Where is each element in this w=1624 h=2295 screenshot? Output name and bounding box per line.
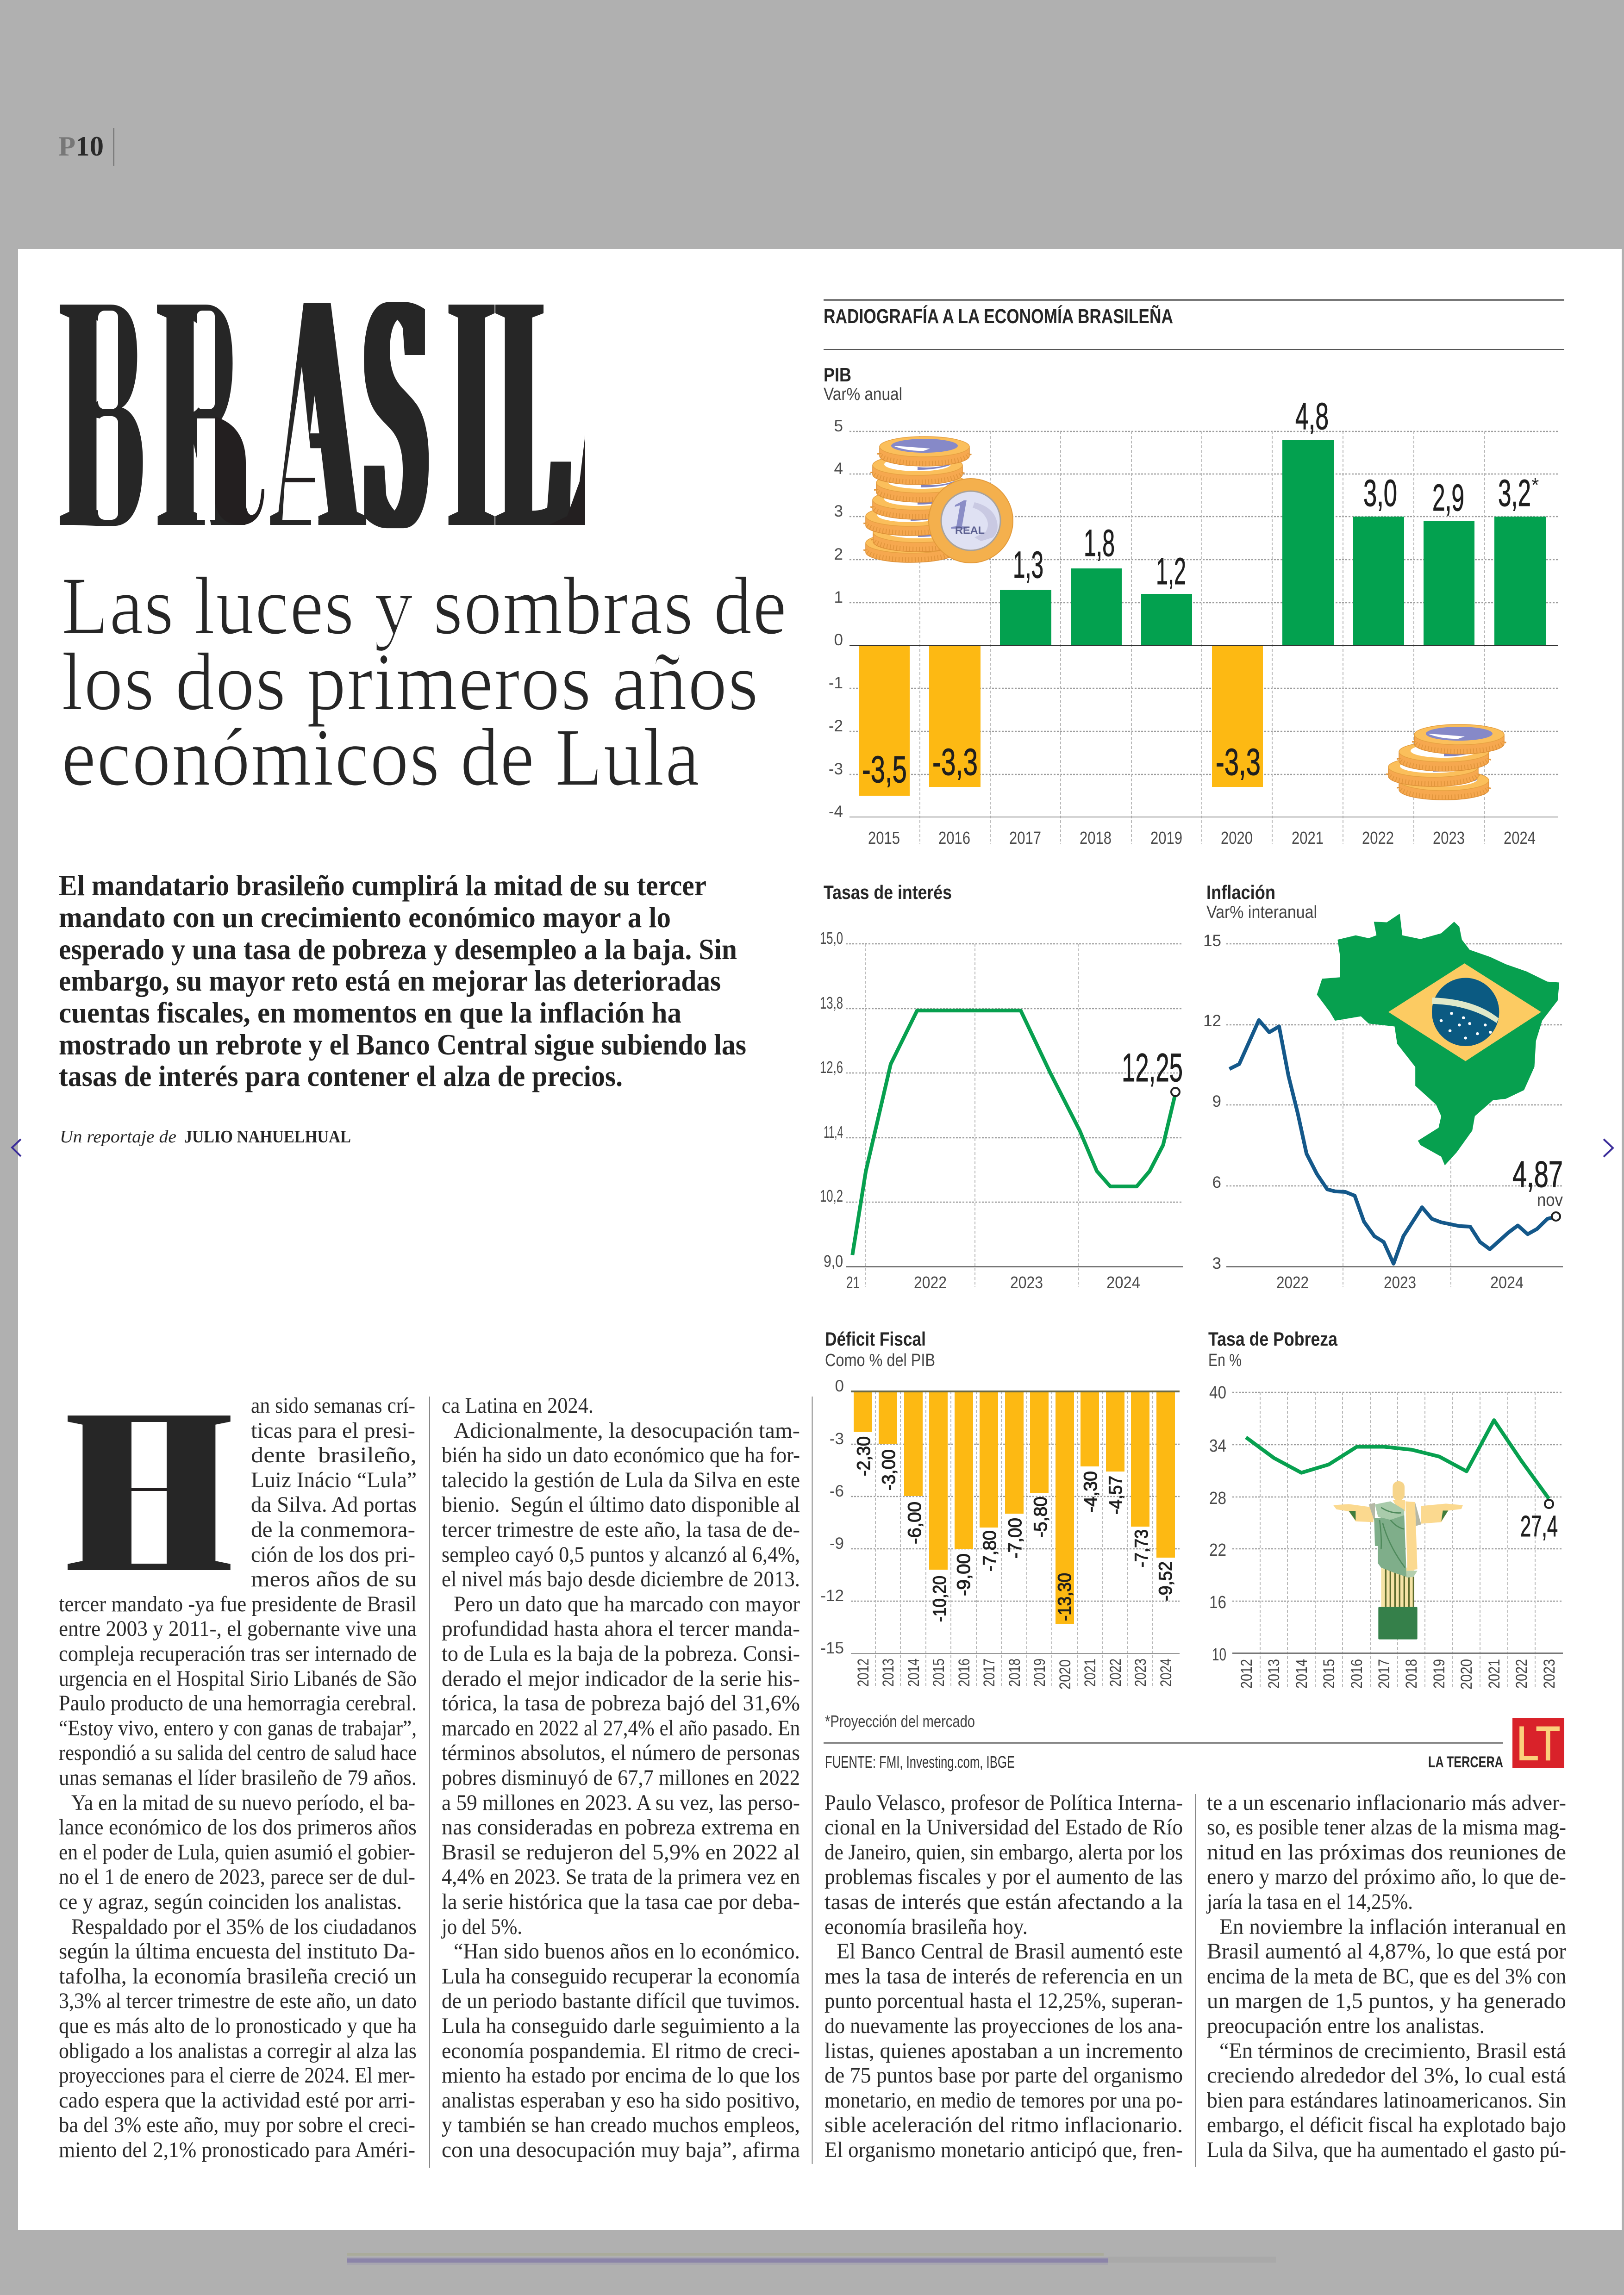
chart: Tasas de interés <box>820 881 1183 1292</box>
article column 2: jo del 5%. <box>441 1915 522 1939</box>
unit: Inflación: Var% interanual <box>1206 903 1317 922</box>
bar value labels: 1,8 <box>1084 522 1115 564</box>
x axis years: 2024 <box>1490 1273 1524 1292</box>
line: poverty rate <box>1246 1420 1549 1499</box>
article column 1: dente brasileño, <box>251 1443 417 1467</box>
x axis years: 2018 <box>1080 829 1112 848</box>
bar value labels: 4,8 <box>1295 395 1329 437</box>
article column 4: te a un escenario inflacionario más adver- <box>1207 1790 1566 1815</box>
x axis years: 2021 <box>1292 829 1324 848</box>
article column 2: bién ha sido un dato económico que ha for- <box>442 1443 800 1467</box>
heading: Inflación: Inflación <box>1206 881 1275 903</box>
x axis years: 2020 <box>1056 1659 1074 1690</box>
byline <box>60 1127 351 1147</box>
byline: JULIO NAHUELHUAL <box>184 1127 351 1147</box>
x axis years: 2015 <box>930 1659 948 1687</box>
intro paragraph: El mandatario brasileño cumplirá la mitad de su tercer <box>59 869 706 902</box>
intro paragraph: mostrado un rebrote y el Banco Central sigue subiendo las <box>59 1028 746 1061</box>
article column 3: El Banco Central de Brasil aumentó este <box>837 1939 1183 1964</box>
y axis labels: 9,0 <box>824 1252 843 1271</box>
x axis years <box>846 1273 1140 1292</box>
y axis labels: -12 <box>820 1587 844 1605</box>
x axis years: 2018 <box>1403 1659 1420 1689</box>
article column 1: “Estoy vivo, entero y con ganas de trabajar”, <box>59 1716 417 1740</box>
article column 2: miento ha estado por encima de lo que los <box>442 2063 800 2088</box>
unit: PIB: Var% anual <box>824 385 902 404</box>
article column 2: nas consideradas en pobreza extrema en <box>442 1815 800 1840</box>
bar value labels: -3,5 <box>862 748 907 791</box>
y axis labels: 10,2 <box>820 1186 843 1205</box>
footnote: *Proyección del mercado <box>825 1712 975 1731</box>
x axis years: 2019 <box>1031 1659 1049 1687</box>
x axis years <box>868 829 1536 848</box>
article column 1: tafolha, la economía brasileña creció un <box>59 1964 417 1989</box>
article column 1: ba del 3% este año, muy por sobre el creci- <box>59 2113 415 2137</box>
article column 2: sempleo cayó 0,5 puntos y alcanzó al 6,4%, <box>442 1542 800 1567</box>
article column 3: Paulo Velasco, profesor de Política Interna- <box>824 1790 1183 1815</box>
y axis labels: -9 <box>830 1534 844 1553</box>
y axis labels: -4 <box>829 803 843 821</box>
source line: FUENTE: FMI, Investing.com, IBGE <box>825 1752 1015 1771</box>
y axis labels: -3 <box>829 760 843 778</box>
bar value labels: 2,9 <box>1432 477 1464 519</box>
bar value labels: -4,57 <box>1106 1476 1126 1515</box>
article column 3: tasas de interés que están afectando a la <box>824 1890 1183 1914</box>
x axis years: 2017 <box>1375 1659 1393 1689</box>
x axis years: 21 <box>846 1273 860 1292</box>
x axis years: 2020 <box>1221 829 1253 848</box>
x axis years: 2022 <box>1513 1659 1530 1689</box>
article column 1: unas semanas el líder brasileño de 79 años. <box>59 1765 417 1790</box>
article column 1: da Silva. Ad portas <box>251 1492 417 1517</box>
y axis labels: 40 <box>1209 1383 1226 1403</box>
x axis years: 2022 <box>914 1273 947 1292</box>
bar value labels: -7,80 <box>980 1530 1000 1572</box>
article column 1: Luiz Inácio “Lula” <box>251 1468 417 1492</box>
y axis labels: 6 <box>1212 1173 1221 1191</box>
article column 2 <box>441 1393 800 2162</box>
article column 3: de 75 puntos base por parte del organismo <box>824 2063 1183 2088</box>
y axis labels: 4 <box>834 460 843 478</box>
article column 4: enero y marzo del próximo año, lo que de- <box>1207 1865 1566 1889</box>
bar value labels: -6,00 <box>905 1502 925 1544</box>
article column 1: respondió a su salida del centro de salud hace <box>59 1740 417 1765</box>
article column 4: embargo, el déficit fiscal ha explotado bajo <box>1207 2113 1566 2137</box>
article column 2: talecido la gestión de Lula da Silva en este <box>442 1468 800 1492</box>
article column 1: ción de los dos pri- <box>251 1542 415 1567</box>
x axis years <box>855 1659 1175 1690</box>
heading: Tasa de Pobreza: Tasa de Pobreza <box>1208 1328 1338 1350</box>
y axis labels: 15 <box>1203 932 1221 950</box>
column rules <box>430 1397 1195 2168</box>
chart: Tasa de Pobreza <box>1208 1328 1563 1690</box>
bar value labels: 1,3 <box>1013 544 1043 586</box>
article column 1: no el 1 de enero de 2023, parece ser de dul- <box>59 1865 415 1889</box>
y axis labels: 9 <box>1212 1092 1221 1110</box>
line: inflation <box>1230 1020 1556 1264</box>
article column 2: el nivel más bajo desde diciembre de 2013. <box>442 1567 800 1591</box>
y axis labels: 11,4 <box>824 1123 843 1141</box>
article column 1: Paulo producto de una hemorragia cerebral. <box>59 1691 417 1715</box>
bar value labels: -3,00 <box>879 1449 899 1491</box>
article column 2: Brasil se redujeron del 5,9% en 2022 al <box>442 1840 800 1865</box>
x axis years: 2017 <box>1009 829 1041 848</box>
infographic header: RADIOGRAFÍA A LA ECONOMÍA BRASILEÑA <box>824 305 1173 328</box>
article column 3: punto porcentual hasta el 12,25%, superan- <box>824 1989 1183 2013</box>
article column 4: bien para estándares latinoamericanos. Sin <box>1207 2088 1566 2113</box>
article column 4: encima de la meta de BC, que es del 3% con <box>1207 1964 1566 1989</box>
intro paragraph: esperado y una tasa de pobreza y desempleo a la baja. Sin <box>59 933 737 966</box>
x axis years: 2023 <box>1010 1273 1043 1292</box>
x axis years: 2022 <box>1362 829 1394 848</box>
y axis labels: -3 <box>830 1430 844 1448</box>
x axis years: 2014 <box>905 1659 923 1687</box>
value: 27,4: 27,4 <box>1520 1509 1558 1543</box>
article column 4: nitud en las próximas dos reuniones de <box>1207 1840 1566 1865</box>
article column 3: mes la tasa de interés de referencia en un <box>824 1964 1183 1989</box>
line: interest rate <box>852 1010 1175 1255</box>
article column 2: Lula ha conseguido darle seguimiento a la <box>442 2014 800 2038</box>
bar value labels <box>862 395 1539 791</box>
y axis labels: 2 <box>834 545 843 563</box>
article column 3 <box>824 1790 1183 2162</box>
article column 1: an sido semanas crí- <box>251 1393 415 1418</box>
x axis years: 2020 <box>1458 1659 1475 1690</box>
intro paragraph: embargo, su mayor reto está en mejorar las deterioradas <box>59 964 721 997</box>
article column 4: creciendo alrededor del 3%, lo cual está <box>1207 2063 1566 2088</box>
y axis labels: 28 <box>1209 1489 1226 1508</box>
heading: Déficit Fiscal: Déficit Fiscal <box>825 1328 926 1350</box>
chart: PIB <box>824 364 1558 848</box>
bar value labels: -5,80 <box>1031 1497 1051 1538</box>
x axis years: 2018 <box>1006 1659 1024 1687</box>
article column 2: a 59 millones en 2023. A su vez, las perso- <box>442 1790 800 1815</box>
icon: small coin stack <box>1388 724 1504 800</box>
x axis years <box>1276 1273 1524 1292</box>
y axis labels <box>820 929 843 1271</box>
article column 2: Pero un dato que ha marcado con mayor <box>454 1592 800 1616</box>
x axis years: 2024 <box>1106 1273 1140 1292</box>
x axis years: 2017 <box>981 1659 998 1687</box>
article column 1: entre 2003 y 2011-, el gobernante vive una <box>59 1616 417 1641</box>
article column 2: profundidad hasta ahora el tercer manda- <box>442 1616 800 1641</box>
y axis labels: 22 <box>1209 1540 1226 1560</box>
bars: Déficit Fiscal <box>854 1391 1175 1624</box>
bars: PIB <box>859 440 1546 796</box>
article column 4: En noviembre la inflación interanual en <box>1219 1915 1566 1939</box>
bar value labels: -2,30 <box>854 1436 874 1476</box>
article column 1: ce y agraz, según coinciden los analistas. <box>59 1890 402 1914</box>
article column 1: Respaldado por el 35% de los ciudadanos <box>71 1915 417 1939</box>
y axis labels: -15 <box>820 1639 844 1657</box>
article column 3: problemas fiscales y por el aumento de las <box>824 1865 1183 1889</box>
y axis labels: 0 <box>834 631 843 649</box>
x axis years: 2013 <box>1265 1659 1283 1689</box>
icon: Brazil map with flag <box>1317 914 1559 1166</box>
x axis years: 2014 <box>1293 1659 1311 1689</box>
y axis labels: 1 <box>834 588 843 606</box>
x axis years: 2015 <box>1320 1659 1338 1689</box>
drop cap: H: H <box>85 1360 213 1621</box>
infographic header <box>824 299 1564 350</box>
article column 4: preocupación entre los analistas. <box>1207 2014 1485 2038</box>
article column 1: urgencia en el Hospital Sirio Libanés de São <box>59 1666 417 1691</box>
y axis labels: 12 <box>1203 1012 1221 1030</box>
article column 2: ca Latina en 2024. <box>442 1393 593 1418</box>
icon: coin stack: REAL <box>955 524 985 536</box>
article column 1: según la última encuesta del instituto Da- <box>59 1939 415 1964</box>
x axis years: 2023 <box>1384 1273 1416 1292</box>
article column 1: compleja recuperación tras ser internado de <box>59 1641 417 1666</box>
article column 1: en el poder de Lula, quien asumió el gobier- <box>59 1840 415 1865</box>
article column 2: 4,4% en 2023. Se trata de la primera vez en <box>442 1865 800 1889</box>
x axis years: 2024 <box>1157 1659 1175 1687</box>
article column 2: con una desocupación muy baja”, afirma <box>442 2138 800 2162</box>
value: 4,87 nov <box>1512 1154 1563 1210</box>
x axis years: 2024 <box>1504 829 1536 848</box>
article column 3: El organismo monetario anticipó que, fren- <box>824 2138 1183 2162</box>
byline: Un reportaje de <box>60 1127 176 1147</box>
x axis years: 2019 <box>1430 1659 1448 1689</box>
article column 1: de la conmemora- <box>251 1517 415 1542</box>
bar value labels: 3,2 <box>1498 472 1531 514</box>
x axis years: 2016 <box>1348 1659 1366 1689</box>
y axis labels: -1 <box>829 674 843 692</box>
y axis labels: 34 <box>1209 1436 1226 1456</box>
value: 12,25: 12,25 <box>1122 1046 1183 1090</box>
y axis labels: 3 <box>834 502 843 520</box>
article column 2: Lula ha conseguido recuperar la economía <box>442 1964 800 1989</box>
x axis years <box>1238 1659 1558 1690</box>
x axis years: 2022 <box>1276 1273 1309 1292</box>
article column 1: tercer mandato -ya fue presidente de Brasil <box>59 1592 417 1616</box>
heading: Tasas de interés: Tasas de interés <box>824 881 952 903</box>
x axis years: 2021 <box>1486 1659 1503 1689</box>
subtitle <box>61 561 787 803</box>
bar value labels: -9,52 <box>1156 1561 1176 1601</box>
y axis labels: 0 <box>835 1377 844 1395</box>
bar value labels <box>854 1436 1176 1622</box>
article column 3: monetario, en medio de temores por una po- <box>824 2088 1183 2113</box>
article column 2: la serie histórica que la tasa cae por deba- <box>442 1890 800 1914</box>
x axis years: 2021 <box>1081 1659 1099 1687</box>
y axis labels <box>829 417 843 821</box>
article column 4: Lula da Silva, que ha aumentado el gasto pú- <box>1207 2138 1566 2162</box>
article column 4: un margen de 1,5 puntos, y ha generado <box>1207 1989 1566 2013</box>
page number: P10 <box>58 131 104 162</box>
intro paragraph: tasas de interés para contener el alza de precios. <box>59 1060 623 1092</box>
marker: latest rate <box>1171 1088 1180 1096</box>
y axis labels: -6 <box>830 1482 844 1500</box>
article column 1: 3,3% al tercer trimestre de este año, un dato <box>59 1989 417 2013</box>
y axis labels: -2 <box>829 717 843 735</box>
article column 4 <box>1206 1790 1566 2162</box>
marker: latest inflation <box>1552 1212 1560 1221</box>
bar value labels: -10,20 <box>930 1576 950 1622</box>
article column 4: so, es posible tener alzas de la misma mag- <box>1207 1815 1566 1840</box>
icon: Christ the Redeemer statue <box>1333 1481 1463 1640</box>
icon: coin stack <box>866 437 1013 563</box>
article column 2: y también se han creado muchos empleos, <box>442 2113 800 2137</box>
chart: Inflación <box>1203 881 1563 1292</box>
article column 4: Brasil aumentó al 4,87%, lo que está por <box>1207 1939 1566 1964</box>
chart: Déficit Fiscal <box>820 1328 1180 1690</box>
logo: LT: LT <box>1517 1717 1560 1771</box>
article column 3: de Janeiro, quien, sin embargo, alerta por los <box>824 1840 1183 1865</box>
article column 2: derado el mejor indicador de la serie his- <box>442 1666 800 1691</box>
value: 4,87 nov: 4,87 <box>1512 1154 1563 1195</box>
article column 2: pobres disminuyó de 67,7 millones en 2022 <box>442 1765 800 1790</box>
subtitle: económicos de Lula <box>61 712 700 803</box>
intro paragraph: mandato con un crecimiento económico mayor a lo <box>59 901 671 934</box>
x axis years: 2023 <box>1433 829 1465 848</box>
navigation arrow right <box>1604 1139 1613 1157</box>
article column 1: que es más alto de lo pronosticado y que ha <box>59 2014 417 2038</box>
bar value labels: -9,00 <box>954 1553 974 1596</box>
article column 1: cado espera que la actividad esté por arri- <box>59 2088 415 2113</box>
source line <box>824 1742 1503 1771</box>
article column 1: proyecciones para el cierre de 2024. El mer- <box>59 2063 415 2088</box>
bar value labels: -3,3 <box>1216 741 1261 783</box>
x axis years: 2012 <box>1238 1659 1255 1689</box>
bar value labels: -3,3 <box>932 741 978 783</box>
source line: LA TERCERA <box>1428 1753 1503 1771</box>
article column 1: meros años de su <box>251 1567 417 1591</box>
bar value labels: -7,73 <box>1131 1529 1152 1567</box>
intro paragraph <box>59 869 746 1092</box>
intro paragraph: cuentas fiscales, en momentos en que la inflación ha <box>59 996 681 1029</box>
article column 2: tercer trimestre de este año, la tasa de de- <box>442 1517 800 1542</box>
x axis years: 2012 <box>855 1659 872 1687</box>
article column 1 <box>59 1393 417 2162</box>
zero line <box>849 645 1558 646</box>
article column 2: bienio. Según el último dato disponible al <box>442 1492 800 1517</box>
y axis labels: 5 <box>834 417 843 435</box>
heading: PIB: PIB <box>824 364 851 386</box>
article column 2: to de Lula es la baja de la pobreza. Consi- <box>442 1641 800 1666</box>
bar value labels: -7,00 <box>1005 1518 1025 1559</box>
y axis labels: 15,0 <box>820 929 843 948</box>
value: 4,87 nov: nov <box>1537 1191 1563 1210</box>
bar value labels: * <box>1531 474 1539 496</box>
y axis labels: 16 <box>1209 1593 1226 1612</box>
bar value labels: 3,0 <box>1363 472 1397 514</box>
bar value labels: 1,2 <box>1156 550 1186 592</box>
bar value labels: -4,30 <box>1081 1471 1101 1513</box>
x axis years: 2013 <box>880 1659 897 1687</box>
title: BRASIL: BRASIL <box>65 226 569 598</box>
article column 1: obligado a los analistas a corregir al alza las <box>59 2039 417 2063</box>
article column 2: analistas esperaban y eso ha sido positivo, <box>442 2088 800 2113</box>
unit: Déficit Fiscal: Como % del PIB <box>825 1351 935 1370</box>
navigation arrow left <box>12 1139 21 1156</box>
x axis years: 2019 <box>1150 829 1182 848</box>
article column 1: Ya en la mitad de su nuevo período, el ba- <box>71 1790 415 1815</box>
article column 4: jaría la tasa en el 14,25%. <box>1206 1890 1413 1914</box>
article column 2: economía pospandemia. El ritmo de creci- <box>442 2039 800 2063</box>
article column 1: ticas para el presi- <box>251 1418 415 1443</box>
x axis years: 2023 <box>1132 1659 1149 1687</box>
article column 1: miento del 2,1% pronosticado para Améri- <box>59 2138 415 2162</box>
icon: coin stack: 1 <box>950 491 971 538</box>
article column 2: “Han sido buenos años en lo económico. <box>454 1939 800 1964</box>
article column 3: cional en la Universidad del Estado de Río <box>824 1815 1183 1840</box>
article column 1: lance económico de los dos primeros años <box>59 1815 417 1840</box>
y axis labels: 13,8 <box>820 993 843 1012</box>
x axis years: 2023 <box>1541 1659 1558 1689</box>
article column 3: listas, quienes apostaban a un incremento <box>824 2039 1183 2063</box>
unit: Tasa de Pobreza: En % <box>1208 1351 1242 1370</box>
article column 2: tórica, la tasa de pobreza bajó del 31,6% <box>442 1691 800 1715</box>
article column 2: términos absolutos, el número de personas <box>442 1740 800 1765</box>
y axis labels: 12,6 <box>820 1058 843 1077</box>
article column 2: Adicionalmente, la desocupación tam- <box>454 1418 800 1443</box>
x axis years: 2015 <box>868 829 900 848</box>
x axis years: 2016 <box>956 1659 973 1687</box>
y axis labels: 3 <box>1212 1254 1221 1272</box>
marker: latest poverty <box>1545 1500 1553 1508</box>
x axis years: 2016 <box>938 829 970 848</box>
y axis labels: 10 <box>1212 1645 1226 1665</box>
subtitle: Las luces y sombras de <box>61 561 787 651</box>
article column 3: economía brasileña hoy. <box>824 1915 1028 1939</box>
scrollbar <box>347 2253 1276 2265</box>
article column 4: “En términos de crecimiento, Brasil está <box>1219 2039 1566 2063</box>
bar value labels: -13,30 <box>1055 1573 1075 1621</box>
subtitle: los dos primeros años <box>61 637 759 727</box>
y axis labels <box>820 1377 844 1657</box>
y axis labels <box>1209 1383 1226 1665</box>
article column 2: marcado en 2022 al 27,4% el año pasado. En <box>442 1716 800 1740</box>
x axis years: 2022 <box>1107 1659 1124 1687</box>
page number <box>58 128 114 166</box>
article column 2: de un periodo bastante difícil que tuvimos. <box>442 1989 800 2013</box>
y axis labels <box>1203 932 1221 1272</box>
article column 3: sible aceleración del ritmo inflacionario. <box>824 2113 1183 2137</box>
article column 3: do nuevamente las proyecciones de los ana- <box>824 2014 1183 2038</box>
